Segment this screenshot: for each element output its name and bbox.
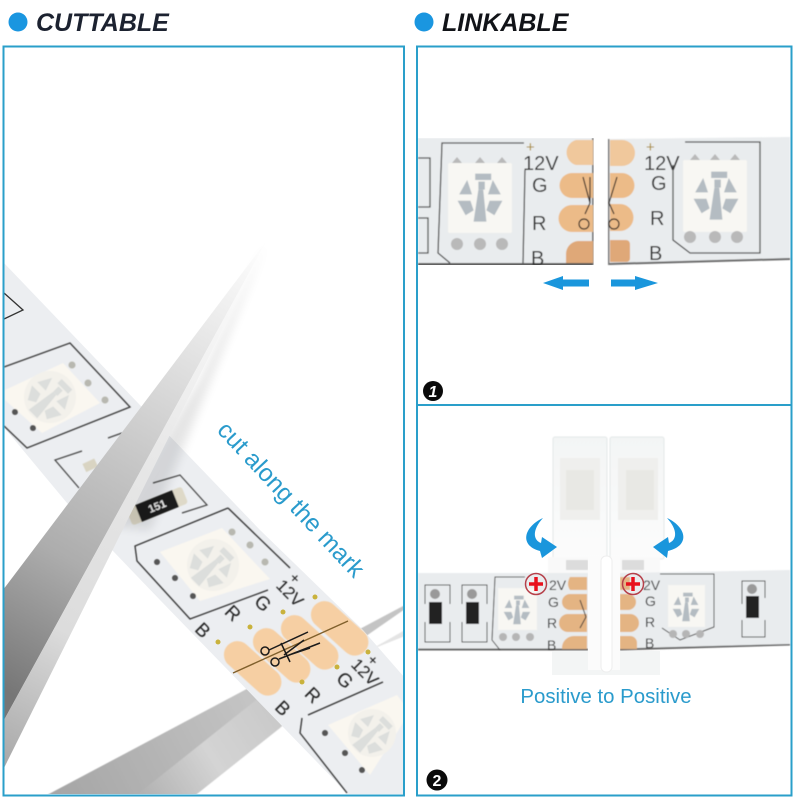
- LED 1: [4, 343, 130, 448]
- strip labels first group: +: [285, 569, 304, 588]
- resistor: 151: [147, 498, 168, 516]
- connector clip lower and centre bar: [552, 556, 660, 675]
- right strip piece: [608, 137, 790, 265]
- left strip piece: R: [532, 213, 546, 235]
- contact dots: [216, 594, 370, 684]
- strip labels first group: B: [190, 619, 214, 643]
- strip labels first group: 12V: [272, 576, 308, 611]
- heading: linkable: LINKABLE: [442, 9, 570, 37]
- strip labels first group: [194, 574, 306, 638]
- cut line: [233, 621, 348, 673]
- panel: cuttable photo: [3, 46, 410, 798]
- plus marker left: [526, 574, 546, 594]
- LED strip body: [3, 262, 405, 798]
- scissors icon: [261, 632, 320, 666]
- frame: [4, 46, 404, 796]
- right strip: G: [645, 593, 656, 609]
- right strip: R: [645, 614, 655, 630]
- curved arrow left: [526, 518, 557, 558]
- right strip piece: +: [646, 139, 655, 156]
- upper tweezer blade: [4, 273, 246, 767]
- right strip piece: R: [650, 208, 664, 230]
- left strip piece: +: [526, 139, 535, 156]
- right strip piece: 12V: [644, 153, 680, 175]
- strip labels second group: R: [300, 684, 324, 708]
- strip labels second group: +: [363, 651, 382, 670]
- resistor: [122, 475, 207, 526]
- badge: step 1: [423, 381, 443, 401]
- LED 2: [135, 508, 290, 619]
- panel: step 2: [418, 437, 790, 790]
- left strip piece: 12V: [523, 153, 559, 175]
- left strip piece: [418, 138, 594, 270]
- right strip piece: B: [649, 243, 662, 265]
- right strip: [620, 570, 790, 651]
- badge: step 2: [426, 770, 448, 790]
- solder pads: [224, 600, 369, 696]
- connector clip upper: [548, 437, 664, 577]
- LED 3: [300, 682, 410, 793]
- strip labels second group: 12V: [347, 655, 383, 690]
- caption: cut along the mark: cut along the mark: [212, 417, 370, 584]
- strip labels second group: G: [332, 668, 357, 693]
- strip labels second group: B: [270, 697, 294, 721]
- right strip: 2V: [643, 577, 661, 593]
- left strip: R: [547, 615, 557, 631]
- strip labels first group: R: [220, 602, 244, 626]
- caption: positive to positive: Positive to Positive: [520, 686, 692, 708]
- plus marker right: [622, 574, 644, 594]
- frame: right panels: [417, 46, 792, 796]
- top partial LED outline: [4, 293, 23, 319]
- left strip piece: G: [532, 175, 548, 197]
- badge: step 1: 1: [429, 384, 438, 401]
- strip labels second group: [274, 656, 380, 716]
- left strip: G: [548, 594, 559, 610]
- left strip: 2V: [549, 577, 567, 593]
- arrow: right: [611, 276, 658, 290]
- left strip: B: [547, 637, 556, 653]
- panel: step 1: [418, 137, 790, 401]
- left strip: [418, 573, 588, 653]
- lower tweezer blade: [47, 605, 405, 798]
- curved arrow right: [653, 518, 683, 558]
- right strip: B: [645, 635, 654, 651]
- heading: cuttable: CUTTABLE: [36, 9, 170, 37]
- right strip piece: G: [651, 173, 667, 195]
- arrow: left: [543, 276, 589, 290]
- small outline and partial resistor: [55, 433, 122, 488]
- strip labels first group: G: [250, 591, 275, 616]
- badge: step 2: 2: [433, 773, 442, 790]
- left strip piece: B: [531, 248, 544, 270]
